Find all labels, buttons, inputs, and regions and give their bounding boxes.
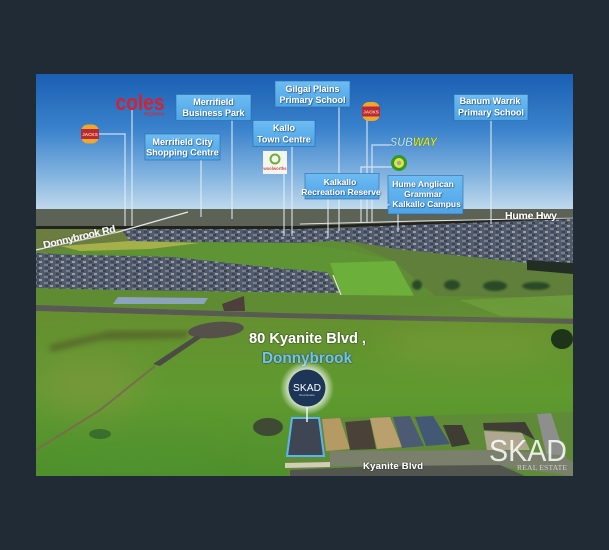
blue roof houses: [393, 416, 424, 448]
footpath: [285, 462, 330, 468]
label: Banum Warrik Primary School: [454, 94, 528, 120]
label: Gilgai Plains Primary School: Primary School: [279, 95, 346, 105]
dirt patch: [222, 296, 245, 311]
verge: [330, 450, 573, 476]
label: Hume Anglican Grammar: [387, 176, 463, 214]
yellow paddock: [60, 241, 200, 251]
logo marker: [280, 361, 334, 415]
beige house slab: [484, 431, 530, 450]
label: Merrifield City Shopping Centre: [145, 134, 220, 160]
foreground field: [36, 311, 573, 476]
distant land: [36, 209, 573, 230]
property boundary: [287, 418, 324, 456]
dark scrub strip: [50, 331, 190, 352]
icon: Hungry Jack's right: JACKS: [363, 110, 379, 114]
logo marker: Real Estate: [299, 393, 315, 397]
title: suburb: Donnybrook: [262, 350, 352, 367]
label: Banum Warrik Primary School: Primary School: [458, 108, 524, 118]
watermark: REAL ESTATE: [517, 463, 567, 472]
label: Hume Anglican Grammar: - Kalkallo Campus: [387, 199, 461, 209]
icon: Hungry Jack's left: [81, 124, 99, 144]
road label: Kyanite Blvd: Kyanite Blvd: [363, 461, 423, 472]
soil lot: [345, 420, 376, 450]
bright green field: [330, 261, 414, 296]
watermark: SKAD: [489, 433, 567, 468]
label: Kallo Town Centre: Town Centre: [257, 134, 311, 144]
driveway: [537, 413, 566, 458]
label: Hume Anglican Grammar: Grammar: [404, 189, 443, 199]
bright paddock right: [460, 295, 573, 318]
right suburb: [319, 219, 573, 263]
photo background: [35, 74, 573, 476]
soil lot 2: [443, 425, 470, 447]
tan lot 1: [322, 418, 350, 451]
street: [290, 465, 525, 476]
label: Merrifield Business Park: [176, 94, 251, 120]
icon: Subway logo: SUB: [390, 135, 413, 149]
label: Kallo Town Centre: [253, 120, 315, 146]
sky: [36, 74, 573, 212]
field lighting: [38, 317, 535, 420]
icon: Subway logo: WAY: [413, 135, 438, 149]
olive field on right: [345, 240, 573, 300]
label: Gilgai Plains Primary School: Gilgai Plains: [285, 84, 340, 94]
pointer lines: [99, 107, 491, 238]
pond: [113, 297, 208, 304]
label: Gilgai Plains Primary School: [275, 81, 350, 107]
icon: coles express logo: coles: [116, 90, 164, 115]
white fence: [333, 275, 341, 295]
ground base: [36, 240, 565, 324]
dark soil: [483, 422, 535, 440]
middle suburb: [121, 228, 334, 243]
tan lot 2: [370, 417, 402, 449]
shrubs: [412, 280, 550, 291]
horizon road highlight: [300, 218, 573, 224]
icon: Subway logo: [390, 135, 438, 149]
icon: Woolworths logo: [262, 151, 287, 174]
pin stem: [306, 404, 308, 422]
subject roof: [288, 419, 323, 456]
label: Merrifield Business Park: Merrifield: [193, 97, 234, 107]
trees: [551, 329, 573, 349]
icon: Woolworths logo: woolworths: [262, 166, 287, 171]
icon: BP logo: [391, 155, 407, 171]
dark green field: [82, 243, 200, 251]
blue roof houses 2: [415, 416, 450, 446]
track: [153, 335, 201, 366]
grass track: [36, 366, 155, 450]
logo marker: SKAD: [293, 383, 321, 394]
Donnybrook Rd line: [36, 212, 188, 250]
label: Kalkallo Recreation Reserve: Recreation Reserve: [301, 187, 381, 197]
label: Kallo Town Centre: Kallo: [273, 123, 295, 133]
label: Merrifield Business Park: Business Park: [182, 108, 246, 118]
label: Merrifield City Shopping Centre: Merrifield City: [152, 137, 213, 147]
icon: Hungry Jack's left: JACKS: [82, 132, 98, 137]
label: Hume Anglican Grammar: Hume Anglican: [392, 179, 454, 189]
label: Kalkallo Recreation Reserve: [301, 174, 381, 199]
tree strip: [527, 260, 573, 274]
horizon road: [36, 217, 573, 229]
icon: Hungry Jack's right: [362, 102, 380, 121]
dirt circle: [188, 322, 244, 338]
title: address: 80 Kyanite Blvd ,: [249, 330, 366, 347]
aerial infographic: [36, 74, 573, 476]
lower paddock band: [36, 288, 516, 300]
left suburb: [36, 253, 340, 293]
lots strip: [285, 412, 573, 476]
main road: [36, 305, 573, 324]
road label: Hume Hwy: Hume Hwy: [505, 210, 557, 222]
label: Merrifield City Shopping Centre: Shopping Centre: [146, 148, 219, 158]
label: Banum Warrik Primary School: Banum Warrik: [460, 96, 521, 106]
road label: Donnybrook Rd: Donnybrook Rd: [42, 223, 117, 251]
label: Kalkallo Recreation Reserve: Kalkallo: [324, 177, 356, 187]
icon: coles express logo: express: [144, 112, 164, 118]
far-left strip of paddock: [36, 228, 130, 252]
